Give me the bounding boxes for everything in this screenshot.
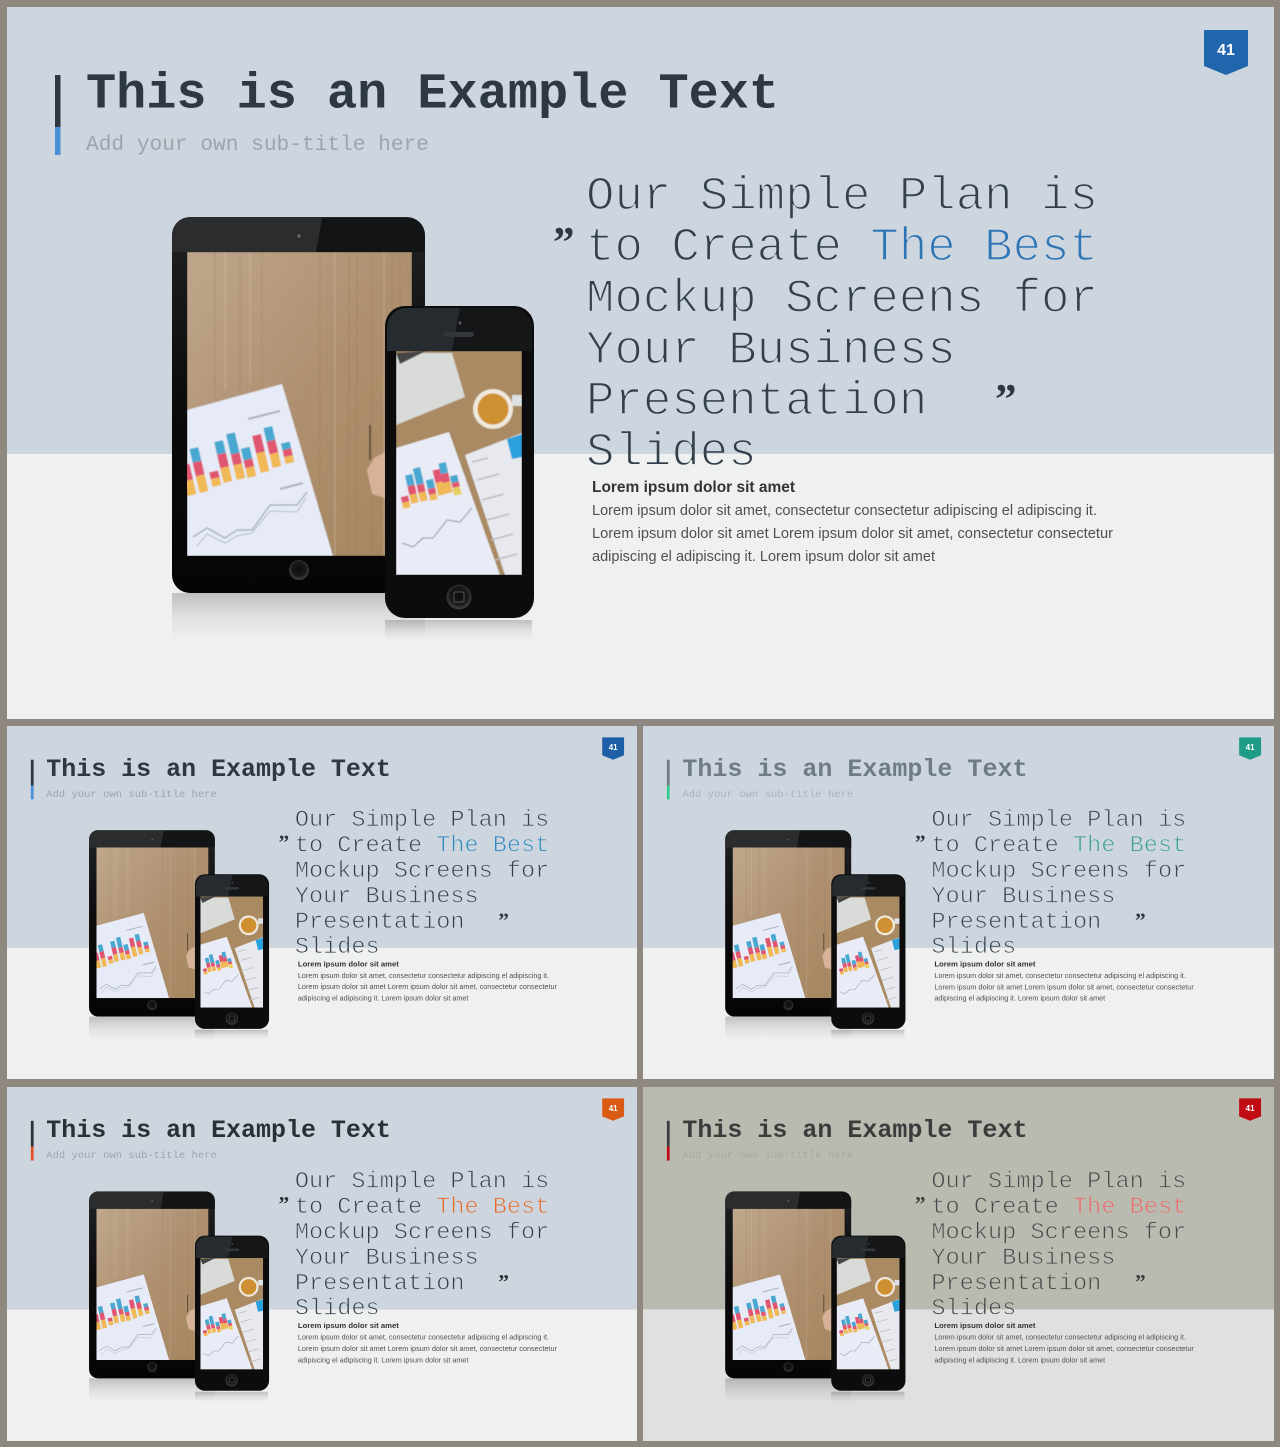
title: This is an Example Text — [682, 1117, 1027, 1145]
quote text: Your Business — [931, 884, 1115, 910]
icon: phone mockup — [195, 1236, 269, 1402]
page number badge — [602, 737, 624, 760]
title accent bar — [667, 760, 670, 799]
body heading: Lorem ipsum dolor sit amet — [592, 479, 795, 496]
panel: small slide orange — [7, 1087, 637, 1441]
body text — [934, 971, 1194, 1003]
title: This is an Example Text — [46, 756, 391, 784]
quote text: Mockup Screens for — [931, 858, 1186, 885]
upper background band — [7, 726, 637, 948]
body heading: Lorem ipsum dolor sit amet — [298, 1321, 399, 1330]
quote text: Presentation — [586, 376, 927, 429]
opening quotation mark: ” — [553, 220, 574, 266]
opening quotation mark: ” — [278, 1192, 289, 1216]
page number badge — [1239, 737, 1261, 760]
opening quotation mark: ” — [915, 1192, 926, 1216]
opening quotation mark: ” — [915, 831, 926, 855]
quote text: Mockup Screens for — [295, 858, 549, 885]
lower background band — [7, 948, 637, 1079]
quote text — [586, 171, 1098, 480]
title accent bar — [55, 75, 60, 155]
panel: small slide red — [643, 1087, 1274, 1441]
panel: main slide (blue) — [7, 7, 1274, 719]
page number badge — [1204, 30, 1248, 75]
icon: tablet mockup — [725, 1191, 851, 1402]
icon: tablet mockup — [172, 217, 425, 640]
quote text: Presentation — [931, 909, 1101, 936]
quote text: Mockup Screens for — [295, 1219, 549, 1246]
body text: Lorem ipsum dolor sit amet Lorem ipsum dolor sit amet, consectetur consectetur — [934, 982, 1194, 991]
body text: Lorem ipsum dolor sit amet Lorem ipsum dolor sit amet, consectetur consectetur — [592, 526, 1113, 542]
quote text — [295, 1168, 549, 1323]
body text: Lorem ipsum dolor sit amet, consectetur consectetur adipiscing el adipiscing it. — [934, 1333, 1186, 1342]
title: This is an Example Text — [682, 756, 1027, 784]
closing quotation mark: ” — [1135, 909, 1146, 933]
page number badge — [602, 1098, 624, 1121]
body text: Lorem ipsum dolor sit amet Lorem ipsum dolor sit amet, consectetur consectetur — [298, 982, 558, 991]
subtitle: Add your own sub-title here — [682, 1150, 853, 1162]
body heading: Lorem ipsum dolor sit amet — [298, 959, 399, 968]
page number badge — [1239, 1098, 1261, 1121]
body text — [298, 1333, 558, 1364]
upper background band — [7, 1087, 637, 1309]
panel: small slide blue — [7, 726, 637, 1079]
page number badge: 41 — [609, 743, 618, 752]
quote text: Slides — [295, 1296, 380, 1323]
page number badge: 41 — [609, 1104, 618, 1113]
quote text: Our Simple Plan is — [931, 1168, 1186, 1195]
quote text: Your Business — [586, 325, 956, 378]
body text — [298, 971, 558, 1003]
quote text: to Create The Best — [295, 1194, 549, 1221]
lower background band — [643, 1309, 1274, 1441]
body text: Lorem ipsum dolor sit amet Lorem ipsum dolor sit amet, consectetur consectetur — [934, 1344, 1194, 1353]
body text: Lorem ipsum dolor sit amet, consectetur consectetur adipiscing el adipiscing it. — [592, 503, 1097, 519]
body text: Lorem ipsum dolor sit amet Lorem ipsum dolor sit amet, consectetur consectetur — [298, 1344, 558, 1353]
title accent bar — [31, 1121, 34, 1161]
title: This is an Example Text — [86, 66, 779, 124]
page number badge: 41 — [1217, 42, 1235, 59]
body text: Lorem ipsum dolor sit amet, consectetur consectetur adipiscing el adipiscing it. — [298, 1333, 549, 1342]
subtitle: Add your own sub-title here — [682, 789, 853, 801]
quote text: Slides — [295, 934, 380, 961]
body text: adipiscing el adipiscing it. Lorem ipsum dolor sit amet — [298, 1355, 468, 1364]
quote text — [931, 807, 1186, 961]
opening quotation mark: ” — [278, 831, 289, 855]
title accent bar — [667, 1121, 670, 1161]
quote text: Your Business — [295, 884, 479, 910]
body text: adipiscing el adipiscing it. Lorem ipsum dolor sit amet — [298, 994, 468, 1003]
quote text: Slides — [931, 934, 1016, 961]
quote text: Mockup Screens for — [586, 274, 1098, 326]
page number badge: 41 — [1246, 743, 1255, 752]
icon: phone mockup — [385, 306, 534, 640]
icon: phone mockup — [831, 1236, 905, 1402]
body text — [592, 503, 1113, 565]
quote text: to Create The Best — [295, 832, 549, 859]
body text: adipiscing el adipiscing it. Lorem ipsum dolor sit amet — [934, 1355, 1105, 1364]
quote text: Presentation — [295, 1270, 464, 1297]
lower background band — [7, 1309, 637, 1441]
upper background band — [643, 1087, 1274, 1309]
upper background band — [643, 726, 1274, 948]
quote text: Our Simple Plan is — [586, 171, 1098, 224]
icon: tablet mockup — [89, 1191, 215, 1402]
quote text: Mockup Screens for — [931, 1219, 1186, 1246]
icon: tablet mockup — [89, 830, 215, 1040]
body text — [934, 1333, 1194, 1364]
quote text: Slides — [586, 427, 757, 480]
body text: adipiscing el adipiscing it. Lorem ipsum dolor sit amet — [934, 994, 1105, 1003]
subtitle: Add your own sub-title here — [46, 789, 217, 801]
lower background band — [7, 454, 1274, 719]
quote text: Our Simple Plan is — [295, 807, 549, 834]
quote text: Slides — [931, 1296, 1016, 1323]
lower background band — [643, 948, 1274, 1079]
subtitle: Add your own sub-title here — [46, 1150, 217, 1162]
closing quotation mark: ” — [498, 1270, 509, 1294]
body heading: Lorem ipsum dolor sit amet — [934, 959, 1036, 968]
body heading: Lorem ipsum dolor sit amet — [934, 1321, 1036, 1330]
closing quotation mark: ” — [995, 376, 1016, 424]
quote text: Our Simple Plan is — [295, 1168, 549, 1195]
icon: phone mockup — [831, 874, 905, 1040]
quote text: Presentation — [295, 909, 464, 936]
closing quotation mark: ” — [1135, 1270, 1146, 1294]
body text: Lorem ipsum dolor sit amet, consectetur consectetur adipiscing el adipiscing it. — [298, 971, 549, 980]
body text: Lorem ipsum dolor sit amet, consectetur consectetur adipiscing el adipiscing it. — [934, 971, 1186, 980]
quote text: to Create The Best — [586, 222, 1098, 275]
quote text — [931, 1168, 1186, 1323]
subtitle: Add your own sub-title here — [86, 133, 429, 157]
quote text — [295, 807, 549, 961]
quote text: Presentation — [931, 1270, 1101, 1297]
quote text: to Create The Best — [931, 1194, 1186, 1221]
quote text: Our Simple Plan is — [931, 807, 1186, 834]
upper background band — [7, 7, 1274, 454]
closing quotation mark: ” — [498, 909, 509, 933]
icon: tablet mockup — [725, 830, 851, 1040]
page number badge: 41 — [1246, 1104, 1255, 1113]
icon: phone mockup — [195, 874, 269, 1040]
body text: adipiscing el adipiscing it. Lorem ipsum dolor sit amet — [592, 549, 935, 565]
quote text: Your Business — [295, 1245, 479, 1272]
title: This is an Example Text — [46, 1117, 391, 1145]
title accent bar — [31, 760, 34, 799]
quote text: Your Business — [931, 1245, 1115, 1272]
panel: small slide green — [643, 726, 1274, 1079]
quote text: to Create The Best — [931, 832, 1186, 859]
